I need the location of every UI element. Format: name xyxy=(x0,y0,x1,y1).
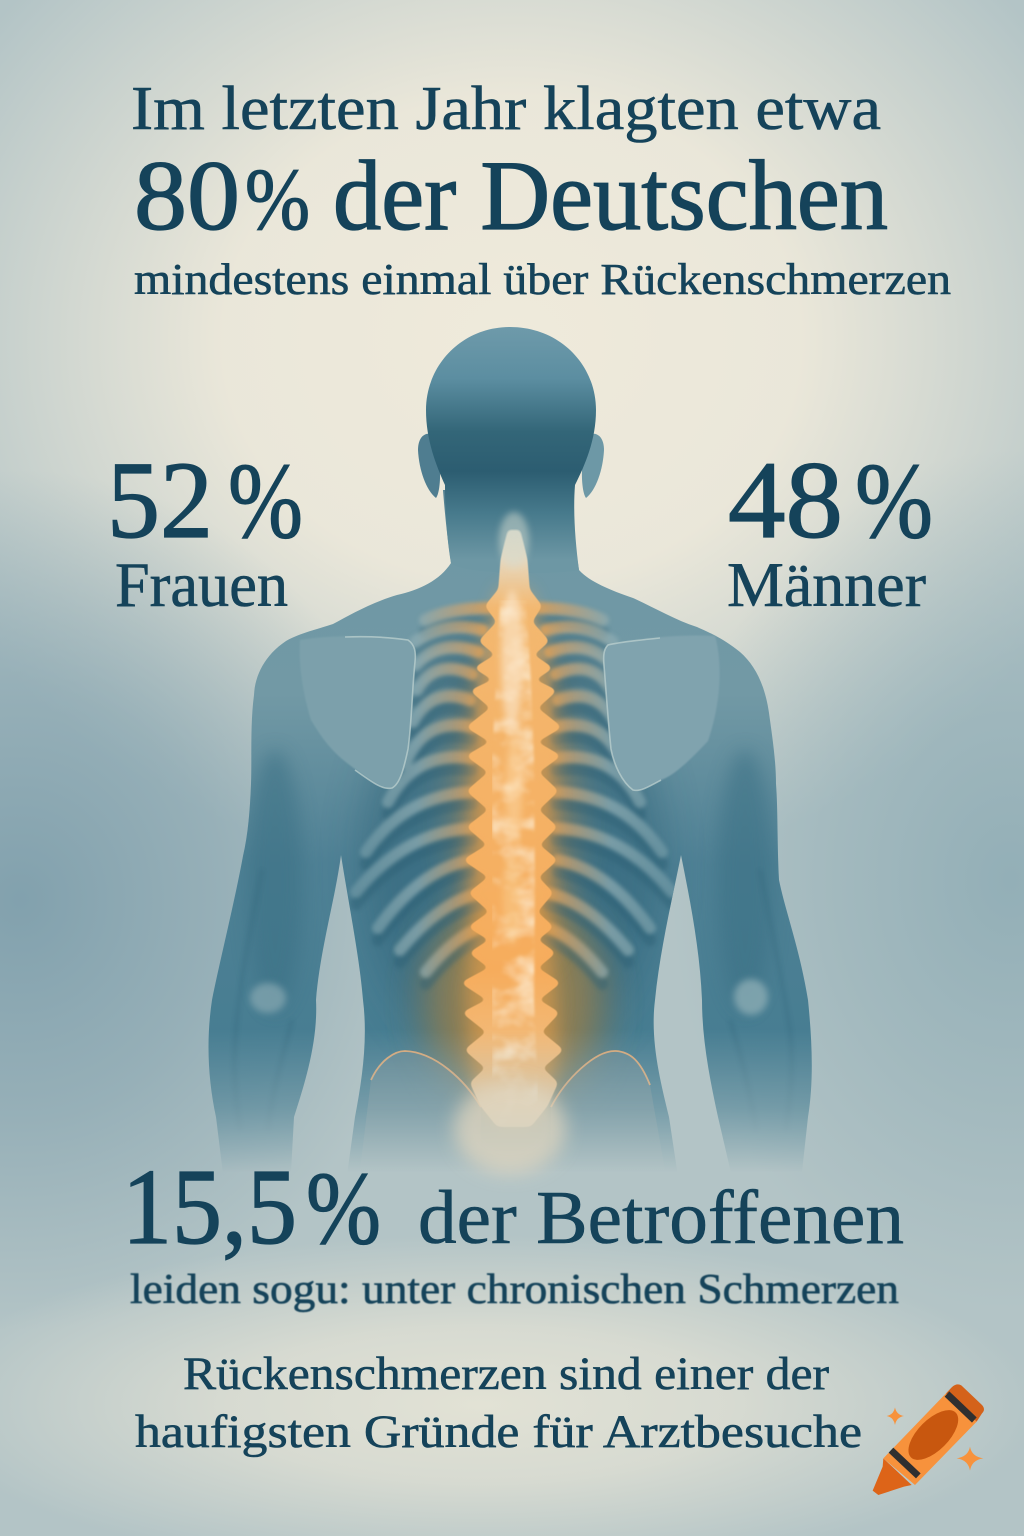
stat: women xyxy=(107,439,303,620)
stat: chronic share: 15,5 xyxy=(122,1148,297,1267)
text: chronic pain: leiden sogu: unter chronischen Schmerzen xyxy=(130,1267,899,1313)
crayon label xyxy=(900,1402,967,1468)
sparkle small xyxy=(887,1407,904,1425)
ribs xyxy=(356,608,672,972)
icon: crayon xyxy=(873,1384,984,1495)
stat: men xyxy=(727,439,933,620)
rib shadows xyxy=(356,620,672,984)
crayon body xyxy=(883,1393,977,1485)
stat: chronic share xyxy=(122,1148,904,1267)
closing statement xyxy=(135,1348,862,1458)
stat: women: 52 xyxy=(107,439,213,561)
closing statement: Rückenschmerzen sind einer der xyxy=(183,1348,829,1400)
title line 1: Im letzten Jahr klagten etwa xyxy=(131,75,881,143)
pelvis right xyxy=(550,1051,665,1170)
stat: women: Frauen xyxy=(115,549,288,620)
title line 2: % xyxy=(245,152,310,249)
stat: men: 48 xyxy=(728,439,843,561)
shading on the back xyxy=(234,608,792,1130)
crayon tip xyxy=(873,1458,912,1495)
spine highlights xyxy=(499,512,529,945)
stat: men: % xyxy=(855,442,933,561)
stat: chronic share: % xyxy=(306,1151,381,1266)
stat: men: Männer xyxy=(727,549,926,620)
pelvis left xyxy=(365,1050,481,1134)
left shoulder blade xyxy=(300,636,415,788)
figure: man from behind with glowing spine xyxy=(209,327,812,1190)
head and neck xyxy=(426,327,596,573)
spine glow xyxy=(467,590,558,1125)
sparkle large xyxy=(957,1447,983,1471)
title line 2: 80 xyxy=(134,140,240,251)
sacrum fog xyxy=(454,1082,566,1174)
left ear xyxy=(418,434,440,498)
right ear xyxy=(582,434,604,498)
right shoulder blade xyxy=(604,635,720,790)
icon: torso and arms xyxy=(209,490,812,1190)
closing statement: haufigsten Gründe für Arztbesuche xyxy=(135,1406,862,1458)
title line 3: mindestens einmal über Rückenschmerzen xyxy=(134,255,951,304)
crayon cap xyxy=(946,1384,984,1422)
stat: women: % xyxy=(228,442,303,561)
title line 2: der Deutschen xyxy=(333,140,888,251)
elbows xyxy=(250,979,768,1015)
crayon band bottom xyxy=(889,1448,921,1478)
arm tendons xyxy=(234,870,792,1130)
stat: chronic share: der Betroffenen xyxy=(418,1176,904,1260)
crayon band top xyxy=(945,1391,977,1423)
spine vertebrae xyxy=(464,530,561,1125)
